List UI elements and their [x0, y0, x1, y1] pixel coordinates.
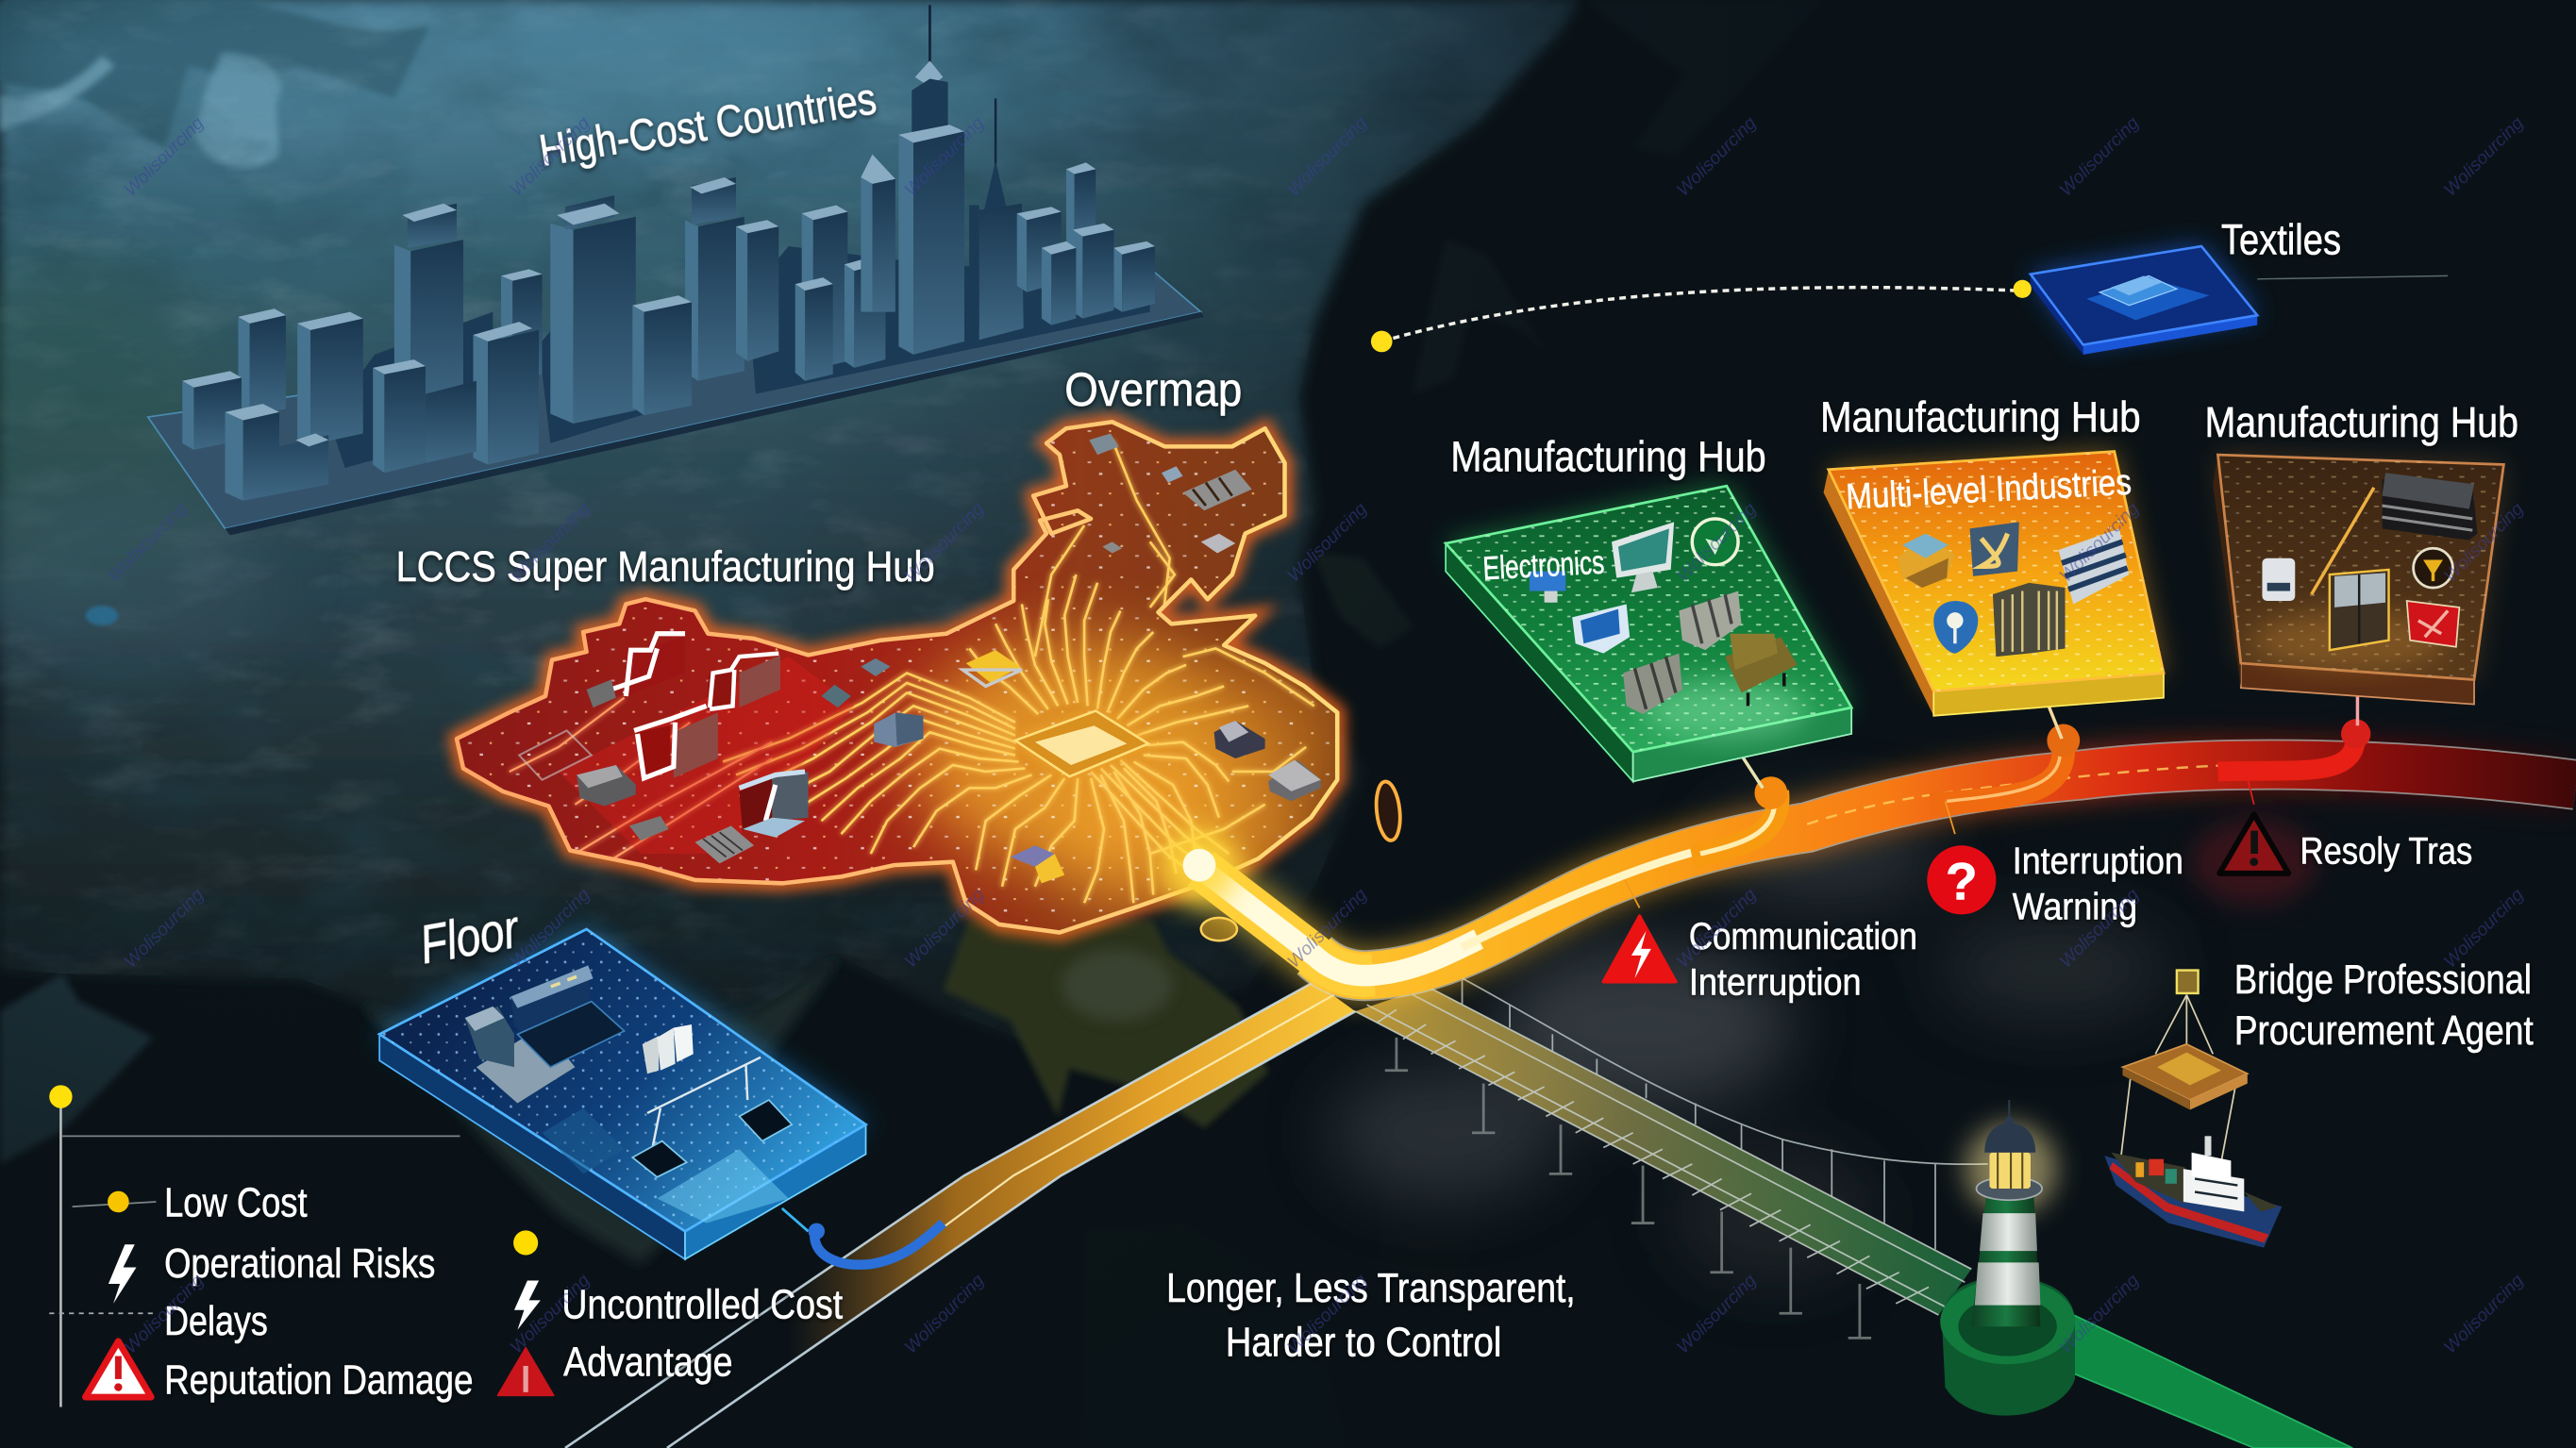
- label: longer, less transparent: Longer, Less Transparent,: [1166, 1266, 1576, 1311]
- callout: interruption warning: Warning: [2013, 887, 2137, 928]
- component: small chips: [822, 650, 1022, 747]
- tallest spire tower: [898, 5, 964, 355]
- circuit traces: [510, 440, 1314, 903]
- label: electronics: Electronics: [1482, 544, 1605, 587]
- label: longer, less transparent: Harder to Control: [1226, 1321, 1501, 1366]
- road: gold band from bottom-left: [565, 982, 1355, 1448]
- callout: resoly tras: Resoly Tras: [2300, 830, 2472, 872]
- icon: sofa: [1725, 634, 1798, 706]
- central chip: [1013, 711, 1150, 778]
- watermark: wolisourcing: Wolisourcing: [901, 1271, 989, 1357]
- textiles panel: [2031, 246, 2257, 355]
- watermark: wolisourcing: Wolisourcing: [2440, 1271, 2528, 1357]
- label: manufacturing hub green: Manufacturing Hub: [1450, 432, 1766, 480]
- icon: buildings: [1993, 583, 2066, 657]
- watermark: wolisourcing: Wolisourcing: [507, 499, 594, 586]
- bridge deck: [1355, 987, 1971, 1315]
- watermark: wolisourcing: Wolisourcing: [1284, 499, 1371, 586]
- watermark: wolisourcing: Wolisourcing: [1673, 499, 1761, 586]
- icon: ribbon tile: [1970, 522, 2019, 576]
- legend item: low cost: Low Cost: [164, 1181, 308, 1226]
- watermark: wolisourcing: Wolisourcing: [121, 1271, 209, 1357]
- watermark: wolisourcing: Wolisourcing: [121, 113, 209, 200]
- label: overmap: Overmap: [1064, 362, 1242, 416]
- callout: communication interruption: [1603, 916, 1917, 1004]
- lighthouse: [1940, 1100, 2075, 1416]
- Hainan island: [1201, 918, 1237, 940]
- icon: red lightning triangle: [1603, 916, 1676, 982]
- icon: textile roll one: [1679, 591, 1742, 650]
- third hub panel (brown): [2213, 455, 2503, 705]
- circuit texture: [468, 430, 1335, 930]
- icon: leaf badge: [1692, 519, 1738, 565]
- watermark: wolisourcing: Wolisourcing: [121, 885, 209, 972]
- icon: stacked textile: [2059, 528, 2129, 604]
- callout: bridge professional procurement agent: Procurement Agent: [2234, 1008, 2534, 1054]
- title: high-cost countries: High-Cost Countries: [536, 73, 879, 175]
- blue panel lift cables: [647, 1057, 761, 1149]
- dome: [1984, 1123, 2035, 1153]
- main supply route pipe: [1160, 719, 2576, 975]
- component: red bracket C: [634, 706, 718, 778]
- callout: resoly tras: [2192, 814, 2472, 905]
- watermark: wolisourcing: Wolisourcing: [1284, 113, 1371, 200]
- icon: textile roll two: [1623, 654, 1682, 714]
- legend item: reputation damage: [86, 1341, 473, 1404]
- background: world map: [0, 0, 1577, 1265]
- label: longer, less transparent: [1166, 1266, 1576, 1366]
- hub connectors: [1625, 690, 2357, 907]
- icon: dark server stack: [2383, 473, 2478, 541]
- icon: question mark: [1927, 845, 1996, 914]
- right buildings: [1017, 162, 1155, 325]
- front buildings: [226, 195, 833, 501]
- blue panel central chip: [465, 965, 625, 1104]
- map outline: [457, 422, 1337, 933]
- icon: small machine: [2262, 558, 2295, 601]
- legend rail lines: [49, 1104, 460, 1406]
- watermark: wolisourcing: Wolisourcing: [901, 885, 989, 972]
- lighthouse glow: [1965, 1123, 2057, 1215]
- callout: interruption warning: Interruption: [2013, 841, 2183, 882]
- watermark: wolisourcing: Wolisourcing: [1284, 885, 1371, 972]
- legend item: advantage: Advantage: [563, 1340, 733, 1385]
- icon: question mark: ?: [1946, 853, 1978, 911]
- pipe edge: [1314, 765, 2576, 975]
- second spire tower: [969, 98, 1024, 340]
- label: textiles: Textiles: [2221, 216, 2341, 264]
- back buildings: [182, 155, 1150, 468]
- watermark: wolisourcing: Wolisourcing: [2440, 885, 2528, 972]
- blue panel white bars: [643, 1024, 694, 1074]
- suspension cable and hangers: [1428, 960, 1988, 1249]
- icon: hourglass badge: [2414, 548, 2452, 588]
- skyline base plate: [148, 273, 1201, 528]
- watermark: wolisourcing: Wolisourcing: [901, 499, 989, 586]
- multi-level industries hub panel (orange): [1824, 452, 2164, 716]
- diagonal gold trace: [2312, 488, 2374, 594]
- branch to orange hub: [1931, 745, 2064, 805]
- green causeway: [2027, 1312, 2352, 1448]
- blue connector: [782, 1208, 943, 1265]
- pipe body: [1314, 765, 2576, 975]
- watermark: wolisourcing: Wolisourcing: [1673, 113, 1761, 200]
- icon: cargo ship: [2104, 1136, 2282, 1248]
- icon: open box: [1898, 534, 1955, 588]
- legend item: low cost: [108, 1181, 308, 1226]
- legend item: delays: Delays: [164, 1299, 268, 1344]
- callout: interruption warning: [1927, 841, 2183, 928]
- red left board highlights: [559, 657, 854, 854]
- pipe glow: [1201, 765, 2576, 975]
- icon: folders: [2330, 570, 2389, 650]
- lantern: [1989, 1153, 2031, 1189]
- legend item: advantage: [498, 1340, 733, 1395]
- icon: monitor: [1612, 522, 1674, 592]
- label: manufacturing hub orange: Manufacturing Hub: [1820, 393, 2141, 441]
- component: grey blocks: [519, 730, 754, 863]
- Taiwan island: [1374, 780, 1403, 841]
- branch to brown hub: [2217, 736, 2356, 772]
- legend item: uncontrolled cost: [514, 1280, 843, 1330]
- watermark: wolisourcing: Wolisourcing: [1673, 885, 1761, 972]
- component: red bracket B: [708, 654, 780, 709]
- label: manufacturing hub brown: Manufacturing Hub: [2205, 398, 2518, 446]
- icon: crane hook and cargo: [2121, 971, 2248, 1162]
- floor hub panel (blue): [379, 929, 866, 1259]
- Indochina land: [943, 920, 1268, 1128]
- high-cost countries skyline: [148, 5, 1204, 535]
- watermark: wolisourcing: Wolisourcing: [1673, 1271, 1761, 1357]
- lighthouse gallery: [1977, 1177, 2042, 1200]
- map fill: [457, 422, 1337, 933]
- fog around the route: [1330, 805, 2168, 1280]
- label: multi-level industries: Multi-level Industries: [1845, 462, 2133, 517]
- watermark: wolisourcing: Wolisourcing: [2440, 113, 2528, 200]
- textiles dashed link: [1371, 275, 2448, 352]
- component: red bracket A: [587, 634, 685, 707]
- label: LCCS super manufacturing hub: LCCS Super Manufacturing Hub: [396, 542, 935, 591]
- label: floor: Floor: [415, 899, 526, 975]
- icon: dark warning triangle: [2219, 814, 2288, 874]
- watermark: wolisourcing: Wolisourcing: [2440, 499, 2528, 586]
- watermark: wolisourcing: Wolisourcing: [2056, 1271, 2143, 1357]
- component: right blocks: [1011, 433, 1321, 883]
- legend: right column: [498, 1230, 843, 1395]
- icon: location pin: [1933, 601, 1978, 654]
- callout: bridge professional procurement agent: [2234, 957, 2534, 1054]
- legend item: operational risks: Operational Risks: [164, 1241, 435, 1287]
- legend: left column: [49, 1085, 473, 1406]
- map glow: [457, 422, 1337, 933]
- lighthouse base: [1942, 1277, 2075, 1416]
- watermark: wolisourcing: Wolisourcing: [507, 113, 594, 200]
- legend item: reputation damage: Reputation Damage: [164, 1358, 473, 1404]
- legend item: uncontrolled cost: Uncontrolled Cost: [561, 1283, 843, 1328]
- icon: red square: [2407, 601, 2459, 647]
- branch to green hub: [1692, 791, 1778, 857]
- watermark: wolisourcing: Wolisourcing: [2056, 113, 2143, 200]
- icon: small pc: [1530, 572, 1565, 603]
- bridge to lighthouse: [1355, 960, 1988, 1338]
- legend item: operational risks: [109, 1241, 435, 1304]
- watermark: wolisourcing: Wolisourcing: [507, 885, 594, 972]
- electronics hub panel (green): [1446, 486, 1851, 781]
- callout: communication interruption: Interruption: [1689, 962, 1862, 1004]
- China map: LCCS manufacturing hub: [443, 410, 1403, 952]
- watermark: wolisourcing: Wolisourcing: [507, 1271, 594, 1357]
- India land: [361, 957, 841, 1264]
- watermark: wolisourcing: Wolisourcing: [105, 499, 192, 586]
- callout: communication interruption: Communication: [1689, 916, 1917, 957]
- watermark: wolisourcing: Wolisourcing: [901, 113, 989, 200]
- lighthouse tower: [1971, 1195, 2040, 1326]
- icon: blue tile: [1572, 604, 1630, 654]
- watermark: wolisourcing: Wolisourcing: [1284, 1271, 1371, 1357]
- watermark: wolisourcing: Wolisourcing: [2056, 885, 2143, 972]
- origin glow point: [1160, 827, 1239, 907]
- watermark: wolisourcing: Wolisourcing: [2056, 499, 2143, 586]
- component: red bracket D: [739, 772, 809, 838]
- bridge piers: [1385, 1038, 1871, 1338]
